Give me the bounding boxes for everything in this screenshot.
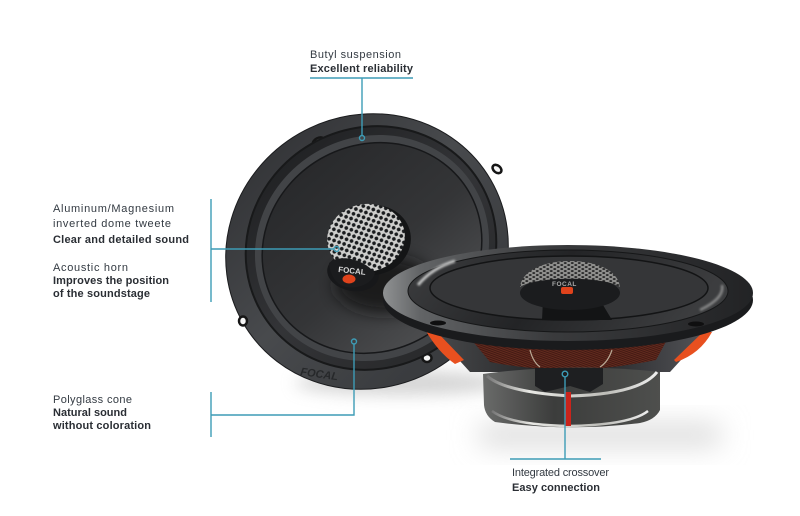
magnet bbox=[483, 367, 660, 427]
basket bowl bbox=[428, 326, 712, 372]
right speaker bbox=[383, 245, 753, 427]
flange logo: FOCAL bbox=[300, 366, 339, 383]
callout: tweeter and horn: Clear and detailed sound bbox=[53, 234, 189, 246]
orange strip right bbox=[674, 332, 712, 362]
callout: integrated crossover bbox=[510, 371, 609, 494]
woven cone back bbox=[470, 338, 668, 370]
callout: integrated crossover: Integrated crossover bbox=[512, 467, 609, 479]
surround bbox=[408, 250, 728, 332]
surround highlight right bbox=[700, 285, 722, 310]
tweeter back bbox=[328, 199, 416, 281]
surround highlight left bbox=[418, 261, 455, 285]
speaker flange bbox=[175, 62, 559, 441]
rim notch right bbox=[688, 322, 704, 326]
callout: tweeter and horn: inverted dome tweete bbox=[53, 218, 171, 230]
crossover bbox=[535, 368, 603, 392]
shadow: left speaker bbox=[295, 371, 505, 395]
tweeter mesh bbox=[520, 261, 620, 287]
crossover wire bbox=[530, 350, 612, 367]
orange strip left bbox=[426, 331, 464, 364]
callout: polyglass cone: Polyglass cone bbox=[53, 394, 132, 406]
surround bbox=[201, 81, 541, 415]
cone bbox=[224, 103, 520, 393]
callout: tweeter and horn: of the soundstage bbox=[53, 288, 150, 300]
callout: integrated crossover: Easy connection bbox=[512, 482, 600, 494]
callout: butyl suspension bbox=[310, 49, 414, 140]
tweeter base bbox=[324, 251, 382, 295]
tweeter body bbox=[520, 276, 620, 310]
tweeter stem bbox=[542, 300, 612, 320]
callout: tweeter and horn: Aluminum/Magnesium bbox=[53, 203, 174, 215]
callout: tweeter and horn bbox=[53, 199, 339, 302]
FOCAL cap label: FOCAL bbox=[338, 265, 366, 277]
callout: polyglass cone: Natural sound bbox=[53, 407, 127, 419]
red wire bbox=[565, 392, 571, 426]
chrome top ring bbox=[487, 372, 657, 396]
tweeter shadow bbox=[335, 257, 435, 313]
mounting holes bbox=[239, 136, 503, 362]
callout: butyl suspension: Butyl suspension bbox=[310, 49, 401, 61]
red button bbox=[561, 287, 573, 294]
rim underside bbox=[383, 250, 753, 350]
rim notch left bbox=[430, 320, 446, 326]
callout: tweeter and horn: Improves the position bbox=[53, 275, 169, 287]
callout: tweeter and horn: Acoustic horn bbox=[53, 262, 128, 274]
rim flange bbox=[383, 245, 753, 341]
red button bbox=[342, 274, 356, 284]
tweeter logo: FOCAL bbox=[552, 281, 577, 288]
cone bbox=[430, 256, 708, 320]
chrome bottom ring bbox=[492, 411, 648, 426]
callout: polyglass cone: without coloration bbox=[52, 420, 151, 432]
tweeter mesh bbox=[322, 198, 410, 278]
callout: butyl suspension: Excellent reliability bbox=[310, 63, 414, 75]
callout: polyglass cone bbox=[52, 339, 356, 437]
shadow: right speaker bbox=[480, 425, 720, 445]
FOCAL cap bbox=[329, 258, 375, 287]
left speaker bbox=[175, 62, 559, 441]
